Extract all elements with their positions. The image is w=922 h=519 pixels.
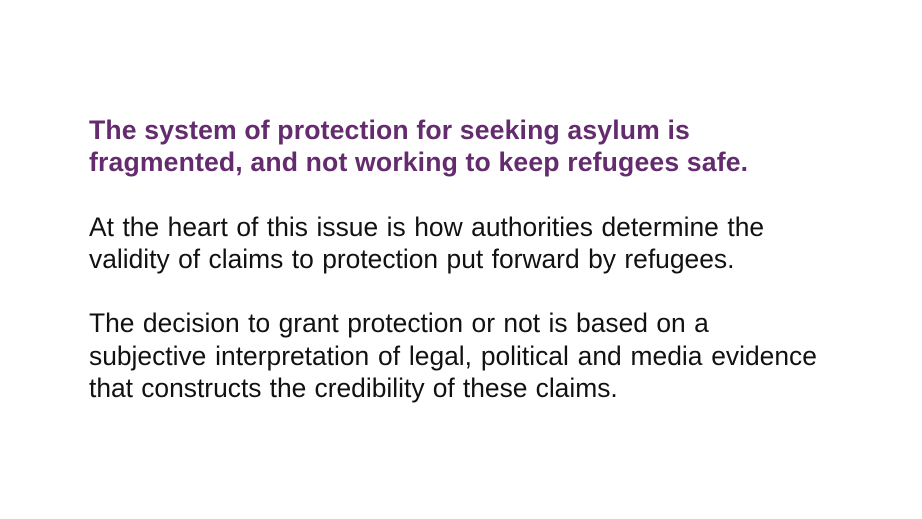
text block: subjective decision: subjective interpretation of legal, political and media evidence <box>89 341 817 371</box>
text block: subjective decision <box>89 308 817 403</box>
heading: fragmented protection system: The system of protection for seeking asylum is <box>89 115 690 145</box>
heading: fragmented protection system: fragmented, and not working to keep refugees safe. <box>89 147 748 177</box>
text block: subjective decision: The decision to grant protection or not is based on a <box>89 308 709 338</box>
heading: fragmented protection system <box>89 115 748 177</box>
text block: validity of claims: validity of claims to protection put forward by refugees. <box>89 244 734 274</box>
text block: validity of claims <box>89 212 764 274</box>
text block: subjective decision: that constructs the credibility of these claims. <box>89 373 618 403</box>
text block: validity of claims: At the heart of this issue is how authorities determine the <box>89 212 764 242</box>
